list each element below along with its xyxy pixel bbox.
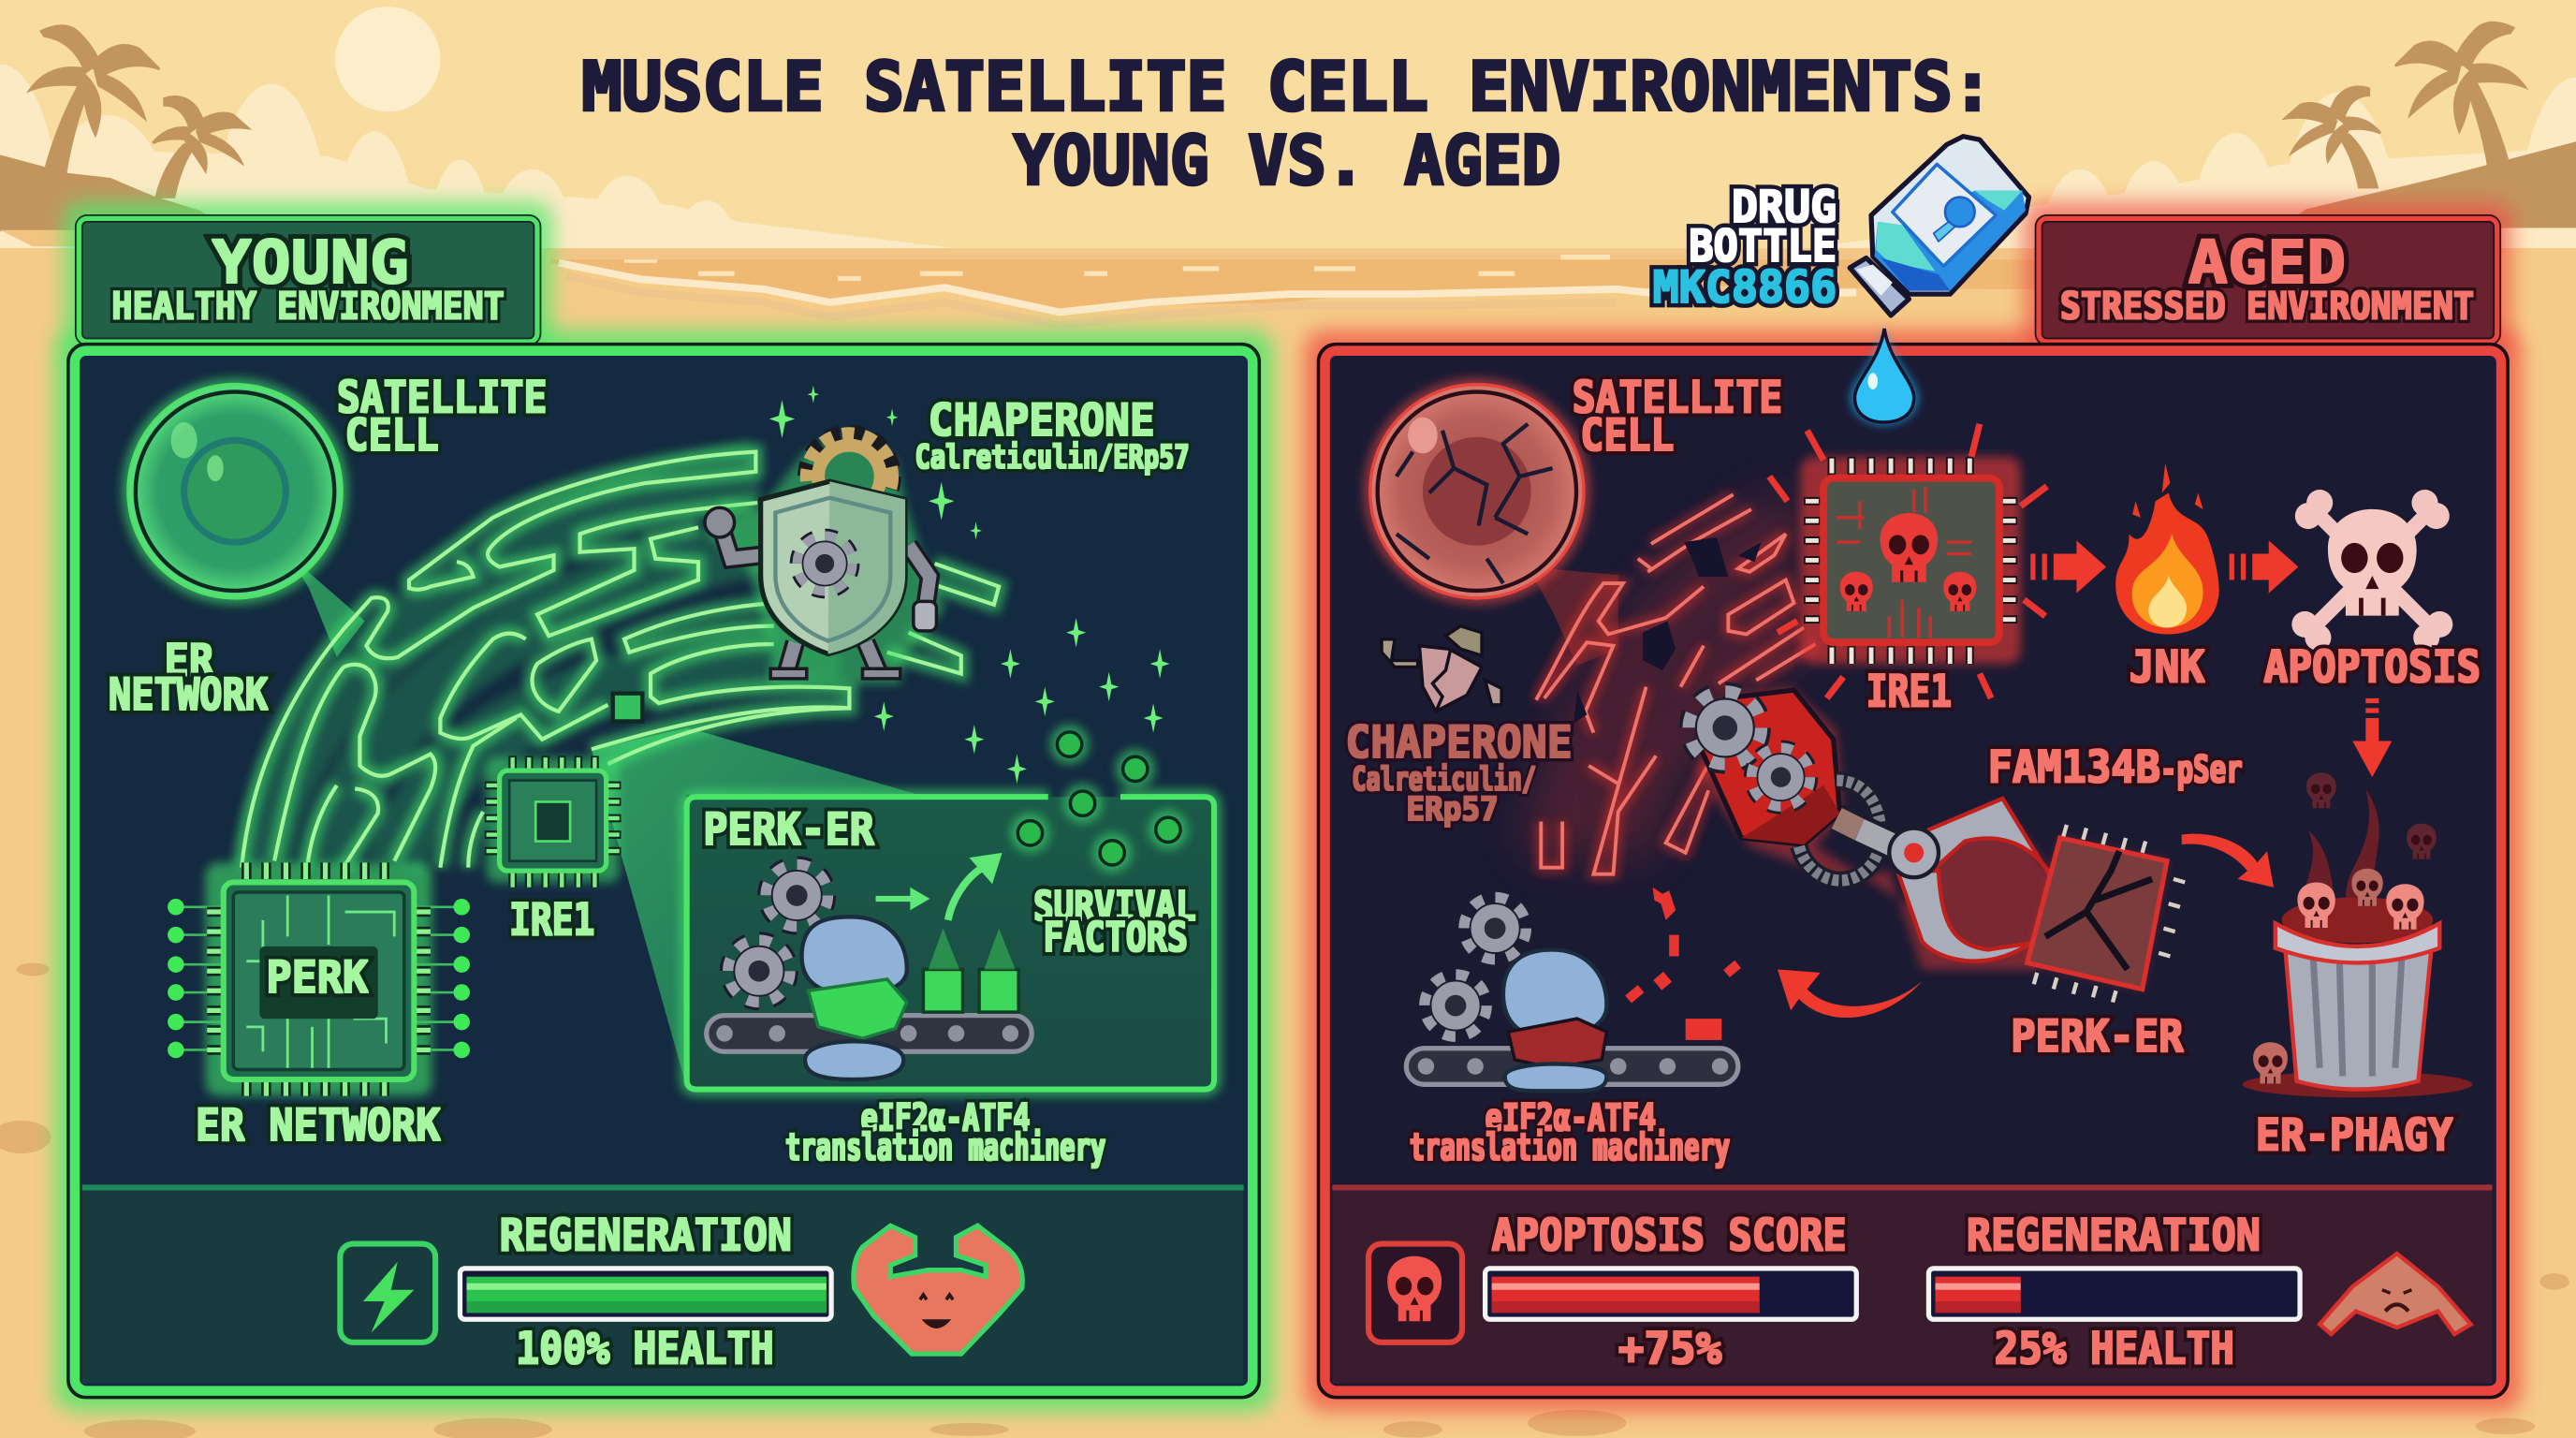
- arrow: apoptosis to ER-phagy: [2352, 698, 2392, 777]
- regeneration gauge: young: REGENERATION: [500, 1211, 792, 1262]
- island left with palms: [0, 26, 248, 230]
- label: chaperone aged: Calreticulin/: [1352, 760, 1536, 799]
- sun: [335, 7, 440, 111]
- gauge: apoptosis score: APOPTOSIS SCORE: [1492, 1211, 1847, 1262]
- cone from cell to ER: [289, 555, 365, 657]
- label: chaperone: [915, 395, 1190, 477]
- gears and ribosome machine: young: [707, 853, 1032, 1079]
- PERK chip: PERK: [266, 952, 369, 1004]
- label: translation machinery young: eIF2α-ATF4: [861, 1095, 1030, 1139]
- label: translation machinery aged: eIF2α-ATF4: [1486, 1095, 1656, 1139]
- label: survival factors: FACTORS: [1044, 914, 1188, 961]
- gauge: apoptosis score: +75%: [1618, 1324, 1722, 1375]
- icon: lightning bolt: [340, 1244, 435, 1343]
- gauge: regeneration aged: [1928, 1211, 2300, 1375]
- label: chaperone aged: ERp57: [1406, 790, 1499, 829]
- label: FAM134B-pSer: -pSer: [2160, 747, 2243, 791]
- arrow: IRE1 to JNK: [2030, 540, 2106, 594]
- icon: skull box: [1368, 1244, 1462, 1343]
- cone from ER to PERK-ER box: [592, 727, 920, 1088]
- title: MUSCLE SATELLITE CELL ENVIRONMENTS:: [581, 48, 1993, 126]
- sparkles: [769, 386, 1170, 784]
- label: JNK: JNK: [2130, 641, 2205, 693]
- label: chaperone: Calreticulin/ERp57: [915, 438, 1190, 477]
- red debris: [1625, 888, 1741, 1040]
- sea band: [550, 250, 2037, 312]
- label: survival factors: [1033, 883, 1196, 961]
- label: survival factors: SURVIVAL: [1033, 883, 1196, 931]
- label: IRE1: IRE1: [509, 895, 594, 946]
- gauge: regeneration aged: REGENERATION: [1967, 1211, 2261, 1262]
- label: translation machinery aged: [1410, 1095, 1730, 1169]
- gauge: regeneration aged: 25% HEALTH: [1995, 1324, 2234, 1375]
- icon: strong muscle: [854, 1225, 1022, 1354]
- label: chaperone: CHAPERONE: [929, 395, 1155, 447]
- survival factor dots: [1010, 725, 1188, 873]
- tab: aged: STRESSED ENVIRONMENT: [2060, 284, 2474, 328]
- label: satellite cell aged: SATELLITE: [1573, 373, 1782, 424]
- robotic claw: [1691, 687, 2062, 969]
- trash can with skulls: [2243, 772, 2472, 1097]
- broken chaperone: [1382, 626, 1501, 712]
- title: YOUNG VS. AGED: [1014, 122, 1560, 200]
- label: FAM134B-pSer: FAM134B: [1988, 741, 2160, 793]
- icon: skull and crossbones: [2291, 490, 2452, 651]
- label: translation machinery young: [785, 1095, 1105, 1169]
- broken PERK-ER chip: [2027, 825, 2185, 1003]
- sand patches: [0, 962, 2569, 1438]
- label: satellite cell: SATELLITE: [337, 373, 547, 424]
- clouds right: [1808, 77, 2576, 248]
- label: translation machinery aged: translation machinery: [1410, 1125, 1730, 1169]
- ER network damaged: [1528, 494, 1815, 874]
- icon: flame: [2115, 463, 2219, 634]
- tab: aged: [2039, 218, 2497, 342]
- regeneration gauge: young: [340, 1211, 1022, 1375]
- gauges: aged: [1368, 1211, 2471, 1375]
- label: chaperone aged: CHAPERONE: [1345, 717, 1573, 769]
- IRE1 chip: aged with skulls: [1769, 424, 2047, 698]
- arrow: PERK-ER to trash: [2182, 834, 2274, 888]
- PERK chip: [168, 862, 470, 1096]
- label: PERK-ER: PERK-ER: [703, 804, 874, 856]
- label: apoptosis: APOPTOSIS: [2263, 641, 2481, 693]
- regeneration gauge: young: 100% HEALTH: [516, 1324, 774, 1375]
- curved arrow: chip to machinery: [1778, 969, 1922, 1018]
- tab: young: YOUNG: [212, 227, 409, 297]
- gauge: apoptosis score: [1486, 1211, 1856, 1375]
- label: ER network lower: ER NETWORK: [196, 1100, 441, 1152]
- label: ER network upper: ER: [165, 635, 214, 686]
- IRE1 chip: young: [485, 756, 621, 888]
- tab: young: HEALTHY ENVIRONMENT: [111, 284, 505, 328]
- small zoom square: [613, 694, 642, 721]
- ER network: [242, 452, 999, 868]
- icon: weak muscle: [2320, 1254, 2471, 1334]
- icon: drug bottle: [1850, 137, 2029, 315]
- label: ER-phagy: ER-PHAGY: [2256, 1110, 2453, 1162]
- stalled translation machinery: [1406, 888, 1741, 1091]
- label: PERK-ER aged: PERK-ER: [2011, 1011, 2184, 1063]
- panel: aged: [1305, 202, 2522, 1412]
- chaperone character: [705, 433, 944, 683]
- title: [581, 48, 1993, 200]
- clouds left: [0, 64, 952, 248]
- label: satellite cell: [337, 373, 547, 462]
- arrow: JNK to apoptosis: [2230, 540, 2298, 594]
- label: translation machinery young: translation machinery: [785, 1125, 1105, 1169]
- label: satellite cell: CELL: [345, 410, 439, 462]
- label: satellite cell aged: CELL: [1580, 410, 1674, 462]
- label: chaperone aged: [1345, 717, 1573, 829]
- satellite cell: young: [122, 378, 348, 605]
- island right with palms: [2284, 22, 2576, 227]
- box: PERK-ER young: [687, 797, 1214, 1090]
- label: drug bottle: DRUG: [1732, 182, 1837, 233]
- icon: drug drop: [1852, 329, 1917, 424]
- shore foam: [559, 263, 1856, 312]
- label: drug bottle: [1653, 182, 1837, 314]
- label: IRE1 aged: IRE1: [1866, 667, 1952, 718]
- smoke: [2304, 788, 2382, 920]
- satellite cell: aged: [1364, 378, 1590, 605]
- tab: aged: AGED: [2188, 227, 2346, 297]
- label: ER network upper: [109, 635, 269, 721]
- panel: young: [54, 202, 1273, 1412]
- label: ER network upper: NETWORK: [109, 669, 269, 721]
- tab: young: [79, 218, 537, 342]
- label: drug bottle: BOTTLE: [1689, 221, 1837, 272]
- label: satellite cell aged: [1573, 373, 1782, 462]
- label: drug bottle: MKC8866: [1653, 262, 1837, 314]
